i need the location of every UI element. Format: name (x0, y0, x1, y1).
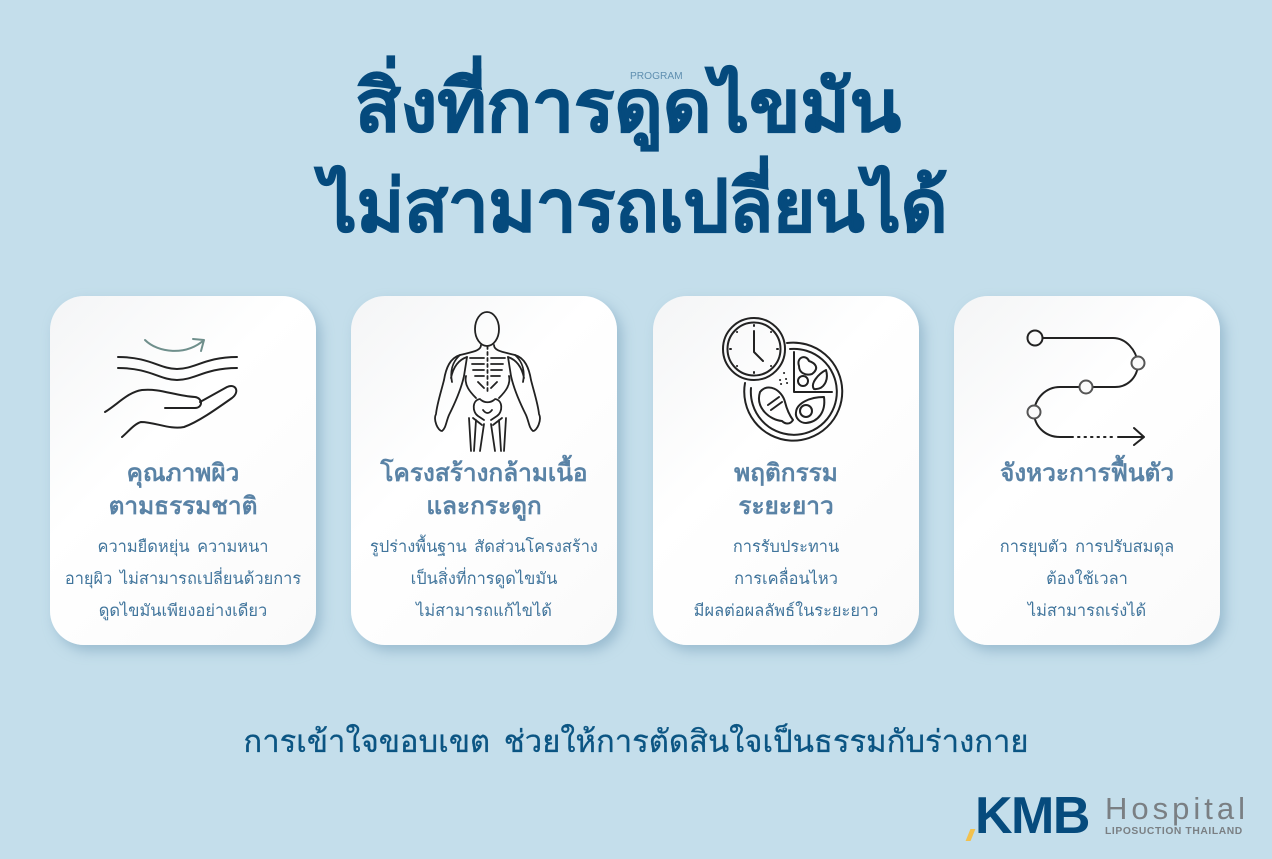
heading: พฤติกรรม (734, 460, 838, 487)
heading (380, 454, 588, 521)
logo accent (966, 829, 975, 841)
heading: ระยะยาว (738, 493, 834, 520)
text (694, 538, 878, 620)
text (370, 534, 598, 620)
heading: และกระดูก (426, 493, 542, 520)
panel: muscle and bone structure (351, 296, 617, 645)
small label: program: PROGRAM (630, 71, 683, 82)
text: ดูดไขมันเพียงอย่างเดียว (99, 602, 267, 620)
text: เป็นสิ่งที่การดูดไขมัน (411, 570, 557, 588)
heading: ตามธรรมชาติ (109, 493, 257, 520)
panel: long-term behavior (653, 296, 919, 645)
text (65, 538, 301, 620)
icon: clock and food plate (722, 317, 844, 442)
text: ต้องใช้เวลา (1046, 570, 1128, 588)
text: ไม่สามารถเร่งได้ (1028, 602, 1146, 620)
icon: recovery path with arrow (1026, 330, 1146, 446)
icon: human skeleton (434, 311, 541, 452)
text: การเคลื่อนไหว (734, 570, 838, 588)
title: ไม่สามารถเปลี่ยนได้ (320, 167, 948, 247)
heading: คุณภาพผิว (127, 460, 239, 487)
heading: จังหวะการฟื้นตัว (1000, 460, 1174, 487)
text: มีผลต่อผลลัพธ์ในระยะยาว (694, 602, 878, 620)
heading (109, 460, 257, 520)
text: อายุผิว ไม่สามารถเปลี่ยนด้วยการ (65, 570, 301, 588)
text (1000, 538, 1174, 620)
panel: skin quality (50, 296, 316, 645)
logo hospital: Hospital (1105, 791, 1249, 826)
heading (734, 460, 838, 520)
text: ความยืดหยุ่น ความหนา (98, 538, 268, 556)
logo: KMB Hospital (966, 787, 1249, 845)
text: ไม่สามารถแก้ไขได้ (416, 602, 552, 620)
logo wordmark: KMB (975, 787, 1089, 845)
text: รูปร่างพื้นฐาน สัดส่วนโครงสร้าง (370, 538, 598, 556)
text: การรับประทาน (733, 538, 839, 556)
title (314, 55, 948, 247)
heading: โครงสร้างกล้ามเนื้อ (380, 460, 588, 487)
footer statement: การเข้าใจขอบเขต ช่วยให้การตัดสินใจเป็นธรรมกับร่างกาย (243, 724, 1029, 759)
logo tagline: LIPOSUCTION THAILAND (1105, 826, 1243, 837)
icon: skin waves and hand (104, 338, 238, 438)
title: สิ่งที่การดูดไขมัน (355, 67, 901, 147)
text: การยุบตัว การปรับสมดุล (1000, 538, 1174, 556)
panel: recovery pace (954, 296, 1220, 645)
